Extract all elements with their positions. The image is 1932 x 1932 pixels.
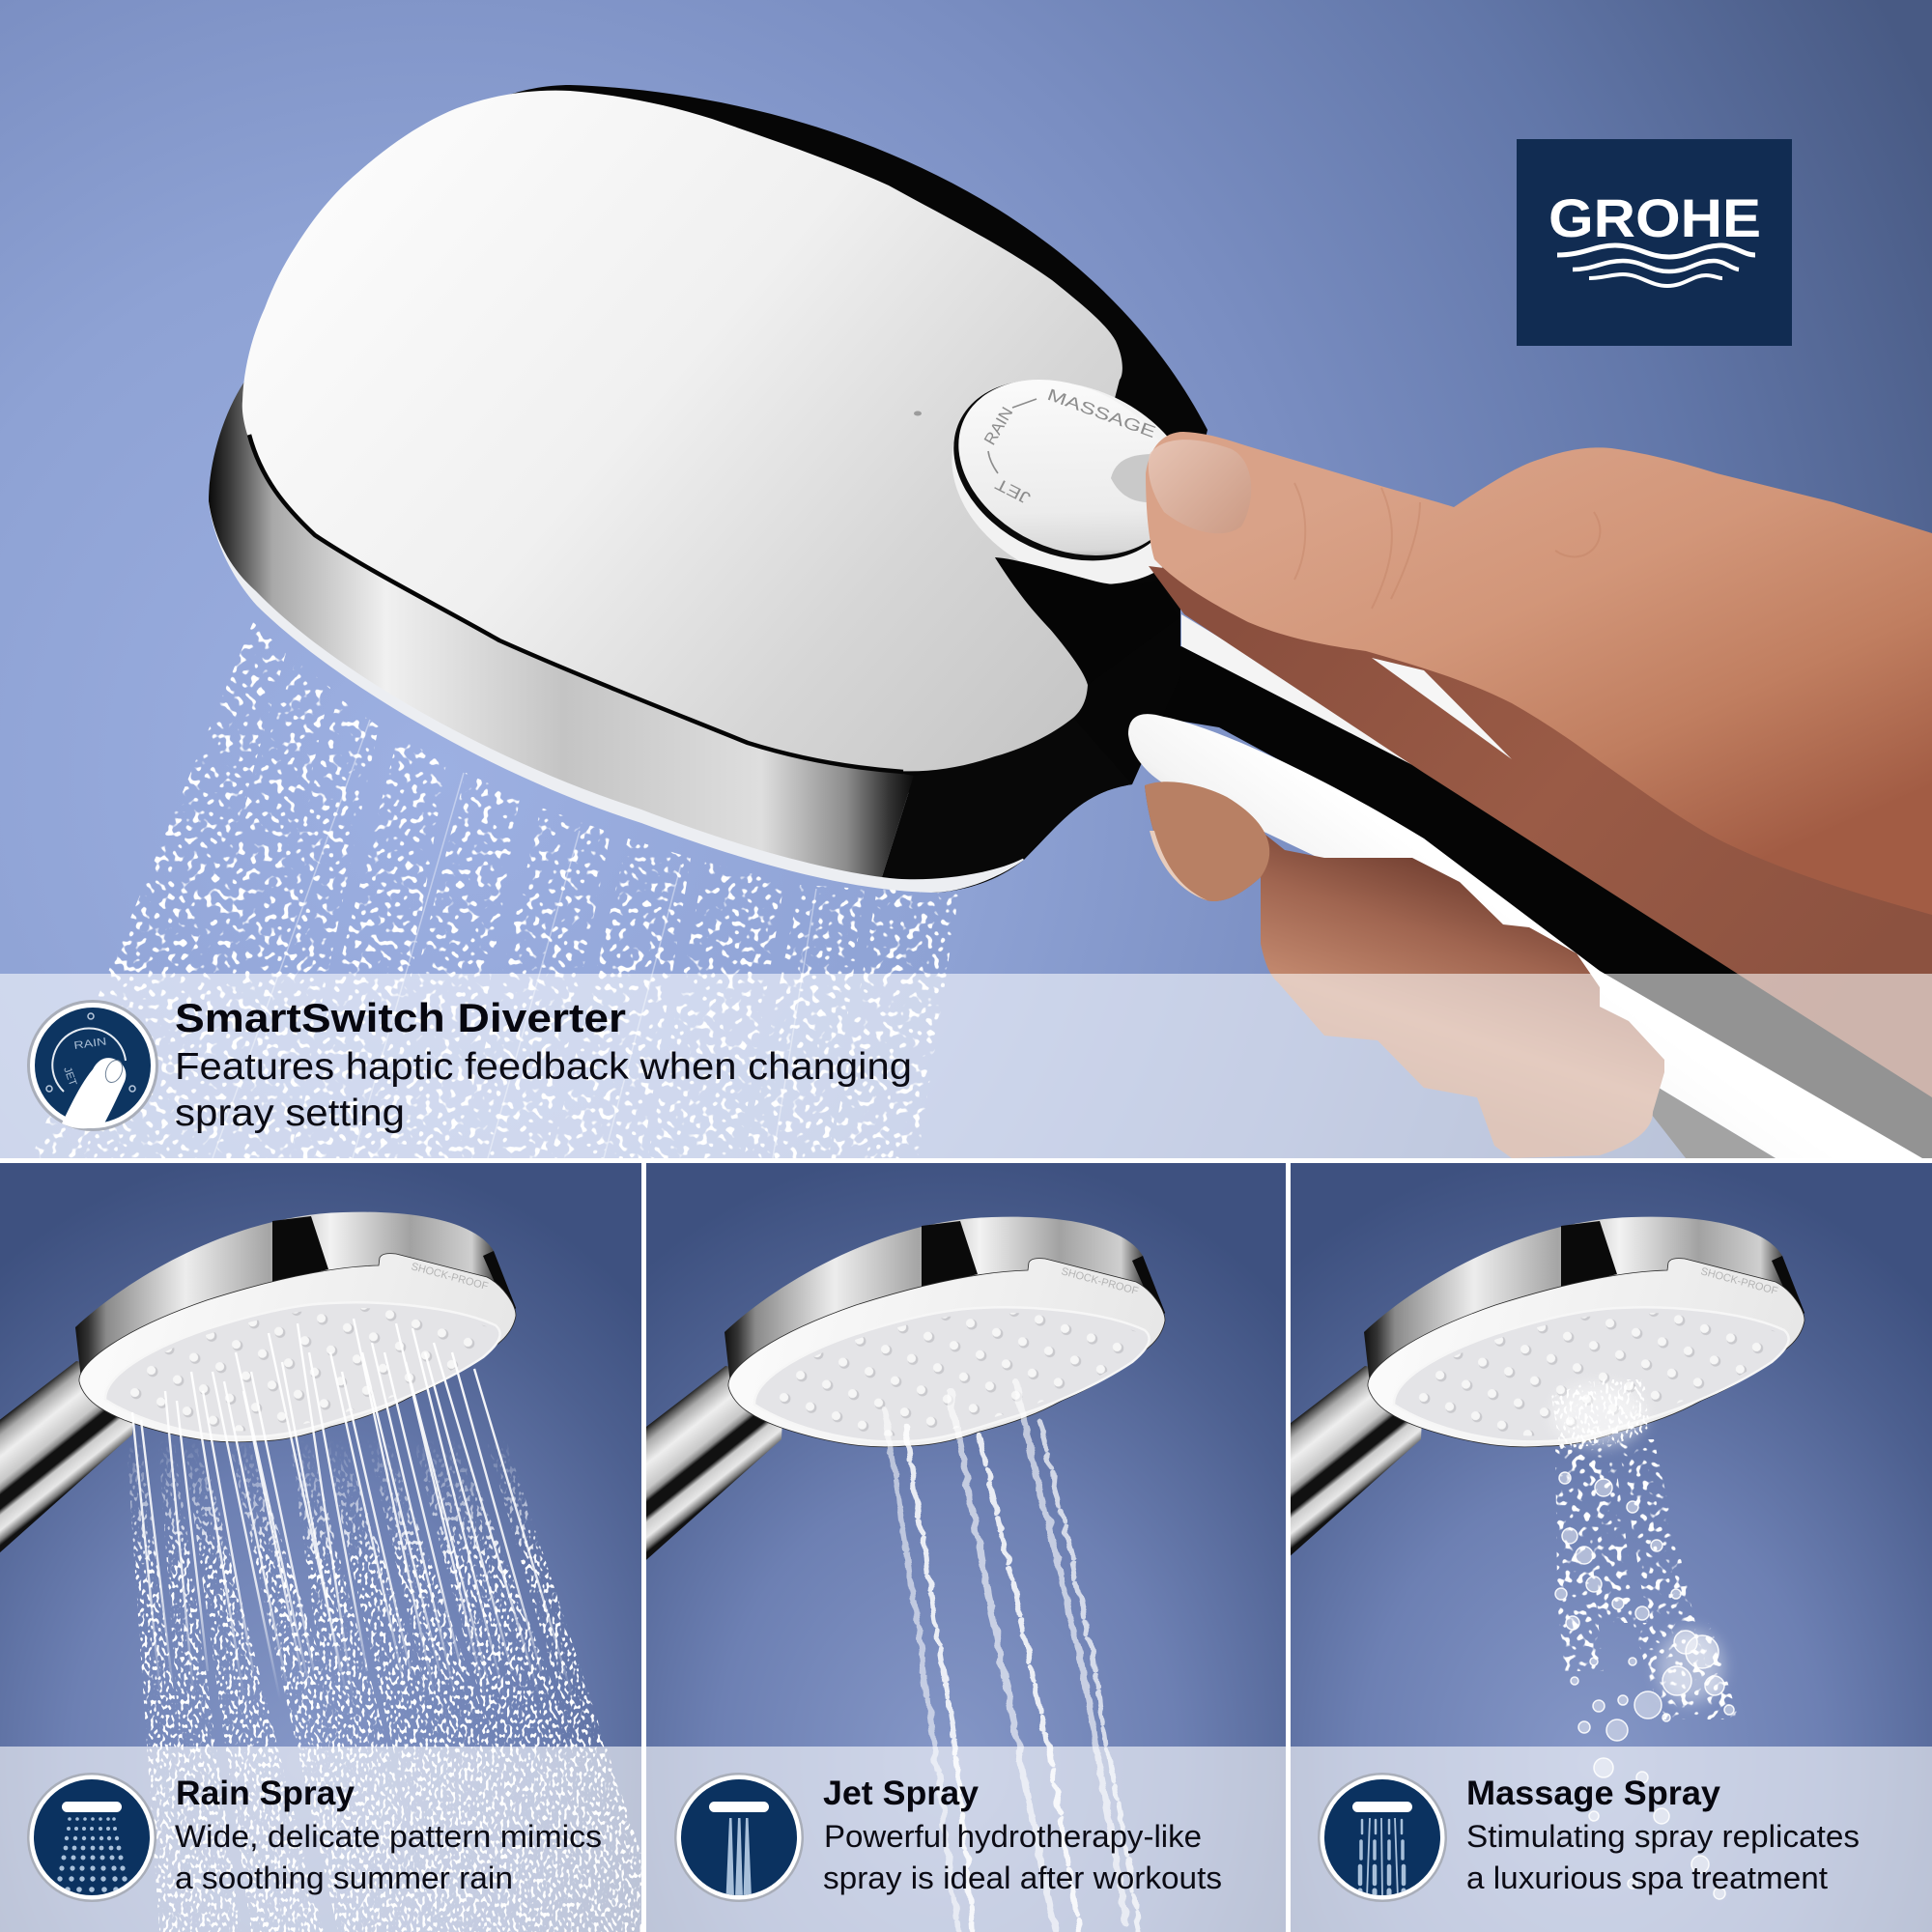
hand: palm behind handle	[1149, 566, 1932, 1097]
handle: shadow strip under bar	[1652, 1088, 1776, 1158]
text: massage line two: a luxurious spa treatment	[1466, 1861, 1828, 1895]
heading: massage spray: Massage Spray	[1466, 1775, 1721, 1812]
switch surround	[952, 384, 1167, 584]
head small mark	[914, 412, 922, 415]
text: jet line two: spray is ideal after workouts	[823, 1861, 1222, 1895]
panel: massage spray	[1269, 1163, 1932, 1932]
shower head main body	[209, 85, 1230, 893]
handle: lower white bar	[1128, 714, 1922, 1158]
rain panel background	[0, 1163, 641, 1932]
rain shower head	[0, 1212, 516, 1570]
water spray droplets	[31, 622, 961, 1158]
button label jet: JET	[992, 474, 1034, 507]
thin water streaks	[213, 720, 816, 1158]
massage caption band	[1291, 1747, 1932, 1932]
massage streams	[1555, 1439, 1739, 1719]
caption: jet spray	[674, 1773, 1222, 1902]
thumb nail	[1149, 440, 1251, 533]
massage water on head	[1551, 1379, 1650, 1449]
button label rain: RAIN	[980, 404, 1016, 448]
jet panel background	[646, 1163, 1286, 1932]
notch black under switch	[995, 557, 1112, 685]
jet shower head	[630, 1217, 1165, 1575]
jet caption band	[646, 1747, 1286, 1932]
panel: hero SmartSwitch photo	[0, 0, 1932, 1158]
button dial ticks	[988, 399, 1037, 473]
logo: GROHE	[1517, 139, 1792, 346]
icon: massage spray	[1318, 1773, 1447, 1908]
caption: SmartSwitch Diverter	[27, 995, 912, 1134]
shock-proof label: SHOCK-PROOF	[1699, 1265, 1779, 1297]
finger nail	[1150, 831, 1208, 900]
icon: SmartSwitch dial	[27, 1000, 158, 1131]
hand: thumb and back of hand	[1146, 432, 1932, 915]
head white front face	[242, 91, 1122, 771]
rain stream lines	[132, 1319, 586, 1744]
shock-proof label: SHOCK-PROOF	[1060, 1265, 1140, 1297]
massage water glow on head	[1552, 1384, 1645, 1446]
SmartSwitch button	[958, 380, 1159, 555]
caption band: SmartSwitch	[0, 974, 1932, 1158]
head black seam line	[249, 435, 903, 772]
divider strip	[0, 1158, 1932, 1163]
massage shower head	[1269, 1217, 1804, 1575]
massage bubbles	[1555, 1472, 1734, 1899]
text: jet line one: Powerful hydrotherapy-like	[824, 1819, 1202, 1854]
logo: GROHE: GROHE	[1548, 187, 1761, 248]
heading: jet spray: Jet Spray	[823, 1775, 980, 1812]
head white bottom rim	[209, 501, 1024, 893]
head dark side transition	[882, 784, 1132, 879]
head chrome side band	[209, 382, 914, 877]
handle: white chrome highlight strip	[1181, 614, 1424, 771]
panel: jet spray	[630, 1163, 1286, 1932]
heading: rain spray: Rain Spray	[176, 1775, 355, 1812]
handle: black chrome reflection	[1082, 646, 1932, 1158]
caption: massage spray	[1318, 1773, 1860, 1908]
icon: jet spray	[674, 1773, 804, 1902]
thumb knuckle creases	[1294, 483, 1600, 609]
hand: white slit of chrome	[1372, 658, 1512, 759]
rain caption band	[0, 1747, 641, 1932]
text: rain line two: a soothing summer rain	[175, 1861, 513, 1895]
text: feature line one: Features haptic feedback when changing	[175, 1046, 912, 1088]
first fingertip	[1145, 781, 1269, 901]
rain droplets	[126, 1369, 667, 1932]
hand: lower fingers	[1145, 781, 1664, 1158]
text: rain line one: Wide, delicate pattern mimics	[175, 1819, 602, 1854]
text: massage line one: Stimulating spray replicates	[1466, 1819, 1860, 1854]
massage panel background	[1291, 1163, 1932, 1932]
text: feature line two: spray setting	[175, 1093, 405, 1134]
button thumb nub	[1111, 454, 1154, 502]
head black rear	[464, 85, 1208, 893]
icon: rain spray	[27, 1773, 156, 1902]
switch black seam	[953, 381, 1151, 560]
panel: rain spray	[0, 1163, 667, 1932]
massage bright cluster glow	[1658, 1630, 1723, 1703]
shock-proof label: SHOCK-PROOF	[410, 1261, 490, 1293]
button label massage: MASSAGE	[1045, 385, 1158, 441]
hero background	[0, 0, 1932, 1158]
jet streams	[885, 1381, 1140, 1932]
icon: SmartSwitch dial: JET	[61, 1065, 78, 1088]
caption: rain spray	[27, 1773, 602, 1902]
icon: SmartSwitch dial: RAIN	[73, 1036, 107, 1052]
heading: SmartSwitch Diverter: SmartSwitch Diverter	[175, 995, 626, 1040]
